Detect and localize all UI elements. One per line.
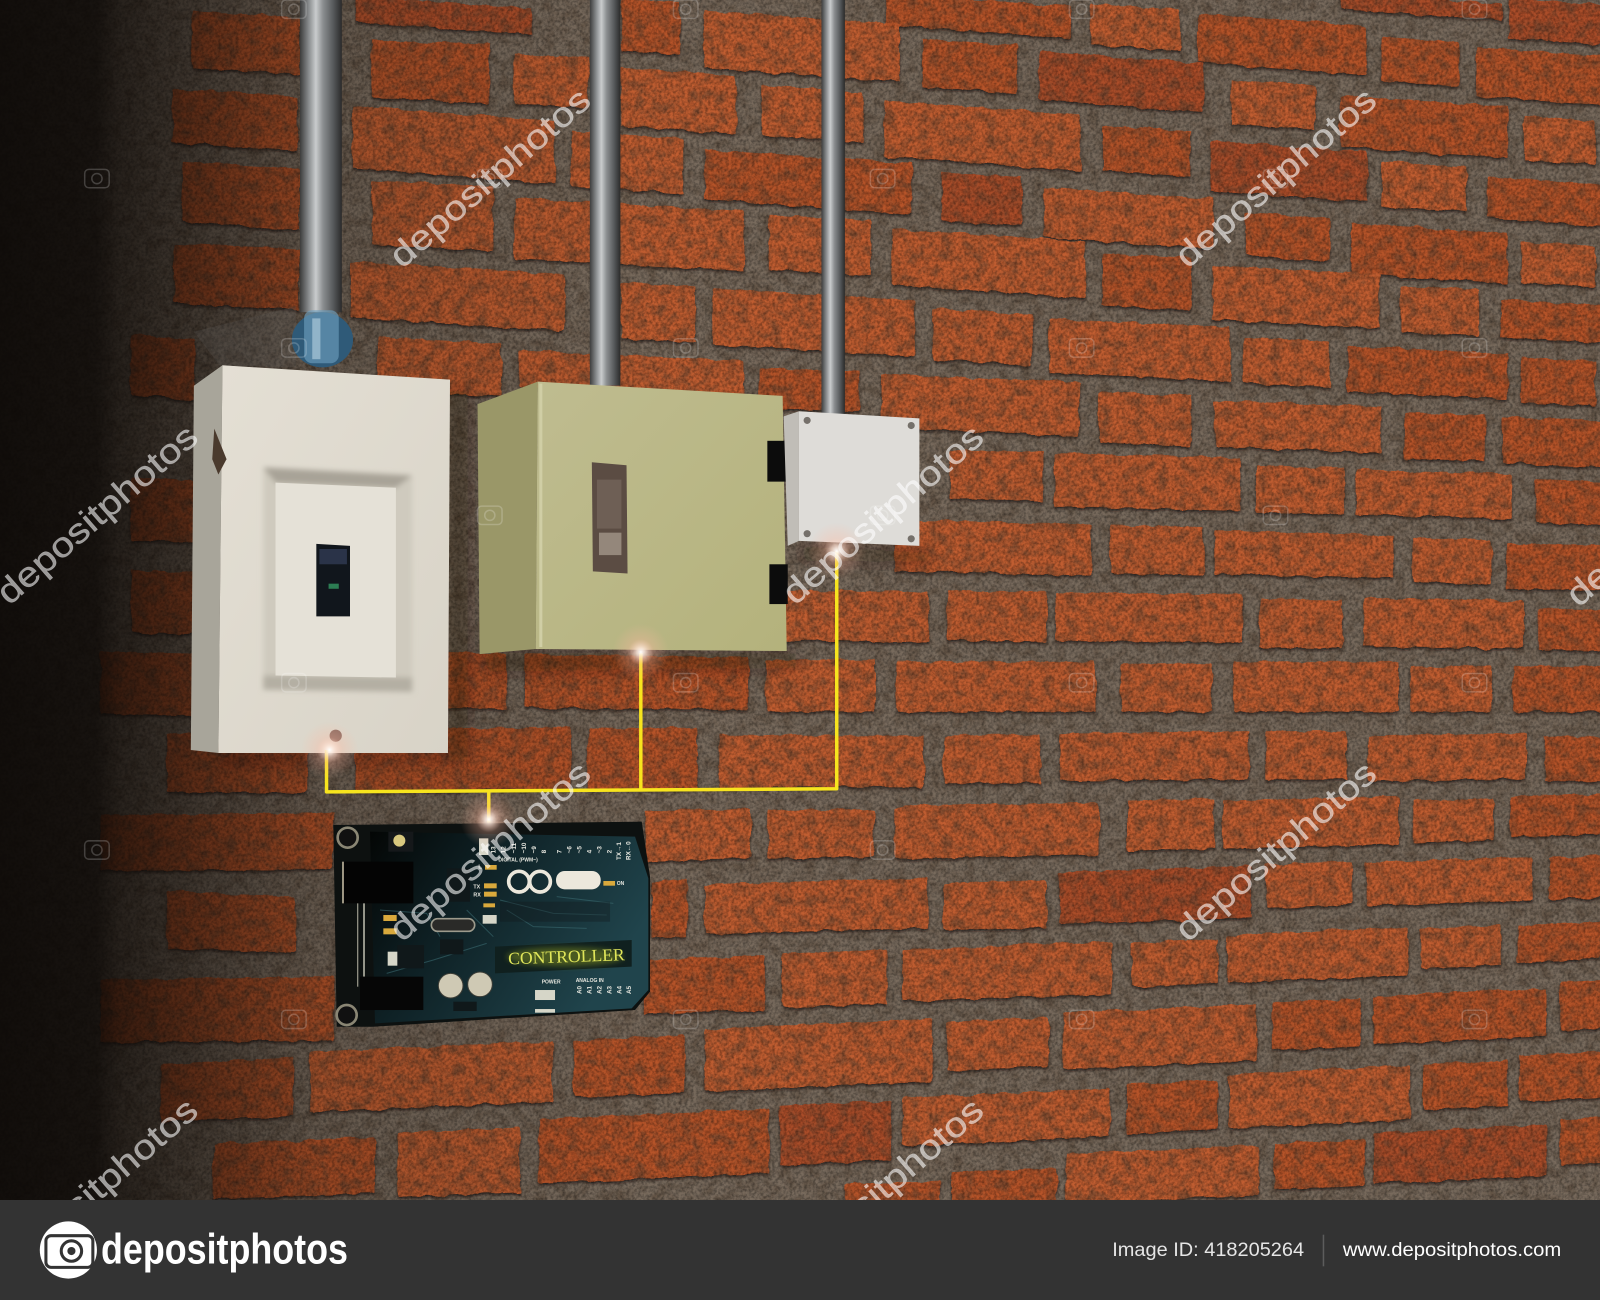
watermark camera icons xyxy=(85,0,1487,1029)
image id: Image ID: 418205264 xyxy=(1112,1239,1304,1261)
controller board xyxy=(333,822,650,1027)
header pin labels xyxy=(473,841,633,994)
diagonal watermark text: depositphotos xyxy=(1168,81,1384,275)
USB port xyxy=(343,862,413,903)
header pin labels: 13 xyxy=(491,846,498,853)
header pin labels: A2 xyxy=(597,985,604,994)
diagonal watermark text: depositphotos xyxy=(382,81,598,275)
SMD parts xyxy=(383,865,615,934)
diagonal watermark text: depositphotos xyxy=(775,1091,991,1286)
diagonal watermark text: depositphotos xyxy=(775,417,991,612)
door latch xyxy=(592,462,628,573)
controller chip label xyxy=(495,940,632,973)
controller chip label: CONTROLLER xyxy=(508,945,626,968)
header pin labels: 12 xyxy=(501,846,508,853)
yellow signal wires xyxy=(327,551,837,822)
capacitors xyxy=(438,972,492,998)
white breaker panel xyxy=(191,365,450,753)
arduino logo xyxy=(509,871,601,892)
header pin labels: A4 xyxy=(617,985,624,994)
header pin labels: RX←0 xyxy=(626,841,633,860)
header pin labels: ~6 xyxy=(567,846,574,853)
header pin labels: ON xyxy=(617,881,625,887)
white junction box xyxy=(784,411,919,546)
pipe coupling wrapped in plastic xyxy=(194,306,353,367)
header pin labels: RX xyxy=(473,893,481,899)
board traces xyxy=(380,897,613,973)
header pin labels: A0 xyxy=(577,985,584,994)
logo wordmark: depositphotos xyxy=(101,1225,348,1273)
breaker switch xyxy=(316,544,350,616)
conduit pipes xyxy=(194,0,845,414)
header pin labels: ~5 xyxy=(577,846,584,853)
header pin labels: TX xyxy=(473,885,481,891)
header pin labels: POWER xyxy=(542,979,561,985)
header pin labels: ~3 xyxy=(597,846,604,853)
header pin labels: A1 xyxy=(587,985,594,994)
header pin labels: 4 xyxy=(587,849,594,853)
header pin labels: L xyxy=(478,865,482,871)
header pin labels: ~9 xyxy=(531,846,538,853)
header pin labels: 2 xyxy=(607,849,614,853)
footer bar xyxy=(0,1200,1600,1300)
diagonal watermark text: depositphotos xyxy=(382,754,598,949)
crystal xyxy=(431,919,475,931)
logo mark: camera in circle xyxy=(40,1221,97,1279)
header pin labels: 7 xyxy=(557,849,564,853)
mounting holes xyxy=(337,828,358,1025)
header pin labels: A3 xyxy=(607,985,614,994)
box shadows on wall xyxy=(219,388,931,763)
light flares at wire ends xyxy=(301,522,865,848)
website url: www.depositphotos.com xyxy=(1342,1239,1561,1261)
header pin labels: A5 xyxy=(626,985,633,994)
header pin labels: TX→1 xyxy=(616,842,623,860)
diagonal watermark text: depositphotos xyxy=(1168,754,1384,949)
header pin labels: 8 xyxy=(541,849,548,853)
power jack xyxy=(360,977,423,1010)
olive electrical cabinet xyxy=(478,382,788,654)
header pin labels: ~11 xyxy=(511,842,518,853)
reset button xyxy=(388,832,413,852)
header pin labels: DIGITAL (PWM~) xyxy=(498,857,538,863)
header pin labels: ANALOG IN xyxy=(576,978,604,984)
cabinet hinges xyxy=(767,441,788,604)
header pin labels: ~10 xyxy=(521,842,528,853)
